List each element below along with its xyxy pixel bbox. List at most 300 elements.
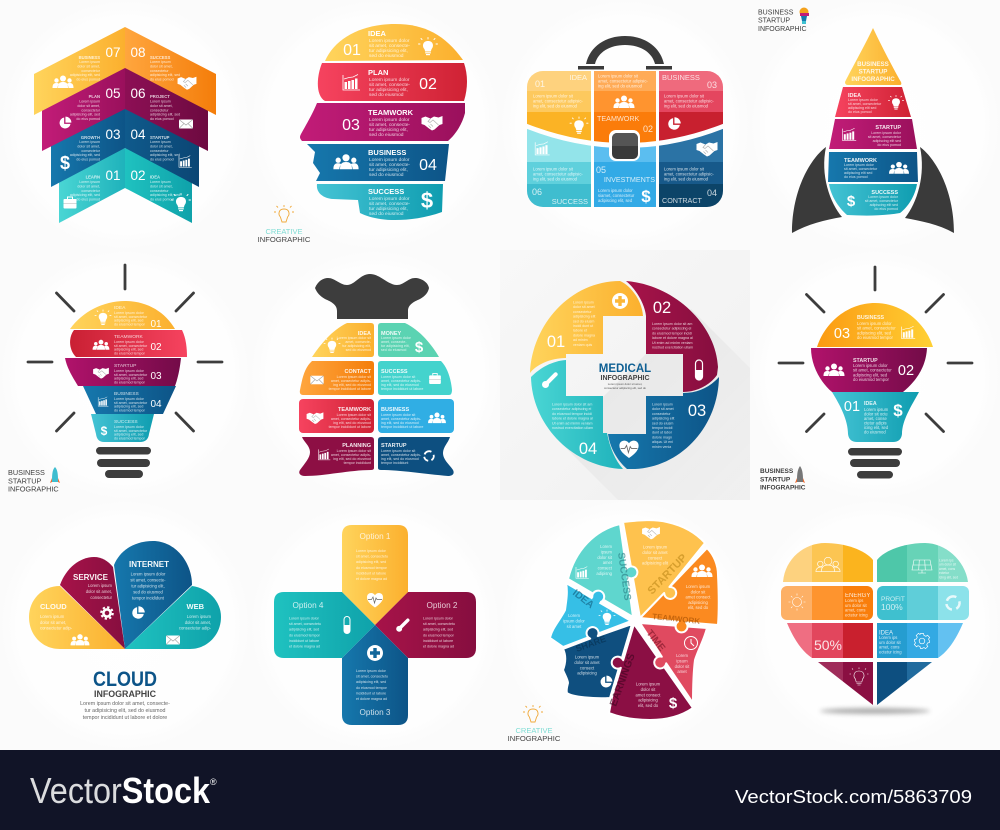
- rocket nose: [845, 28, 901, 85]
- arrow: blue 03 04: STARTUP: [150, 135, 170, 140]
- logo: business startup rocket right: BUSINESS: [760, 468, 793, 475]
- heart text and icons: um dolor sit: [879, 640, 901, 645]
- segment: teamwork: 03: [342, 117, 360, 134]
- medical segment 01: 01: [547, 333, 565, 351]
- rocket idea: adipiscing elit sed: [848, 106, 876, 110]
- briefcase text and icons: ing elit, sed do eiusmod: [664, 104, 709, 108]
- arrow: blue 03 04: dolor sit amet,: [150, 144, 173, 148]
- medical segment 03: dolore magn: [652, 435, 672, 439]
- bag cell startup: STARTUP: [381, 443, 407, 449]
- arrow: blue 03 04: Lorem ipsum: [150, 140, 171, 144]
- bag cell teamwork: amet, consectetur adipis-: [331, 417, 372, 421]
- segment: plan: Lorem ipsum dolor: [369, 78, 410, 83]
- arrow: purple 05 06: 06: [130, 86, 146, 101]
- heart text and icons: Lorem ips: [939, 558, 953, 562]
- bag cell teamwork: [299, 399, 374, 433]
- option 1: sit amet, consectetu: [356, 555, 388, 559]
- bulb segment success: sit amet, consectetur: [114, 429, 148, 433]
- puzzle earnings: [609, 624, 693, 720]
- cloud segment internet: sit amet, consecte-: [130, 578, 166, 582]
- bulb segment business: do eiusmod tempor: [114, 408, 146, 412]
- heart shadow: [820, 708, 930, 714]
- heart text and icons: ectetur icing: [879, 649, 902, 654]
- panel: plus options: [274, 525, 476, 725]
- medical segment 03: dolor sit amet: [652, 407, 674, 411]
- bag cell success: tempor incididunt ut labore: [381, 387, 423, 391]
- bag cell money: Lorem ipsum dolor: [381, 336, 411, 340]
- segment: teamwork: sed do eiusmod: [369, 132, 404, 138]
- logo: business startup top: STARTUP: [758, 18, 790, 25]
- bag cell startup: Lorem ipsum dolor sit: [381, 449, 415, 453]
- segment: plan: PLAN: [368, 68, 388, 77]
- logo: business startup top: BUSINESS: [758, 10, 793, 16]
- option 4: et dolore magna ad: [289, 644, 320, 648]
- medical segment 02: 02: [653, 299, 671, 317]
- medical segment 02: [626, 281, 718, 392]
- cloud segment web: Lorem ipsum: [187, 614, 211, 619]
- bulb segment 02: Lorem ipsum dolor: [853, 363, 888, 368]
- segment: business: tur adipisicing elit,: [369, 167, 408, 173]
- bag cell planning: tempor incididunt: [344, 461, 371, 465]
- puzzle texts and icons: $: [669, 695, 678, 712]
- bulb segment 03: do eiusmod tempor: [857, 335, 893, 340]
- segment: success: $: [421, 188, 433, 213]
- bulb segment business: Lorem ipsum dolor: [114, 397, 144, 401]
- briefcase text and icons: ing elit, sed do eiusmod: [664, 176, 709, 182]
- bulb segment idea: [70, 301, 175, 330]
- option 3: et dolore magna ad: [356, 697, 387, 701]
- bulb base: [96, 447, 151, 478]
- bulb segment idea: do eiusmod tempor: [114, 322, 146, 326]
- segment: plan: 02: [419, 76, 437, 93]
- option 2: incididunt ut labore: [423, 639, 453, 643]
- cloud title: [80, 668, 170, 721]
- bag cell money: [378, 323, 439, 357]
- medical segment 03: adipisicing elit: [652, 417, 674, 421]
- medical segment 01: incidi dunt ut: [573, 324, 593, 328]
- puzzle texts and icons: TIME: [644, 628, 667, 654]
- briefcase cells: [527, 71, 723, 208]
- medical segment 03: dunt ut labor: [652, 431, 673, 435]
- segment: teamwork: tur adipisicing elit,: [369, 127, 408, 133]
- cloud segment web: dolor sit amet,: [185, 620, 211, 625]
- briefcase text and icons: ing elit, sed do eiusmod: [533, 176, 578, 182]
- arrow: teal 01 02: LEARN: [86, 174, 100, 180]
- puzzle idea: [550, 583, 631, 647]
- segment: business: 04: [419, 157, 437, 174]
- bag cell planning: [299, 437, 374, 476]
- cloud segment internet: INTERNET: [129, 560, 169, 569]
- bag cell teamwork: Lorem ipsum dolor sit: [337, 413, 371, 417]
- rocket startup: sit amet, consectetur: [868, 135, 902, 139]
- arrow: yellow and orange 07 08: do eius pomod: [76, 78, 100, 82]
- puzzle texts and icons: SUCCESS: [615, 552, 633, 602]
- panel: briefcase: [527, 36, 723, 208]
- briefcase text and icons: IDEA: [569, 73, 587, 82]
- briefcase text and icons: 01: [535, 79, 545, 89]
- arrow: teal 01 02: Lorem ipsum: [79, 180, 100, 184]
- segment: business: sed do eiusmod: [369, 172, 404, 178]
- panel: cloud: [29, 541, 221, 721]
- option 2: do eiusmod tempor: [423, 633, 455, 637]
- rocket idea: Lorem ipsum dolor: [848, 98, 878, 102]
- puzzle texts and icons: adipisng: [596, 571, 613, 576]
- bulb segment success: SUCCESS: [114, 419, 138, 425]
- option 3: adipisicing elit, sed: [356, 680, 386, 684]
- puzzle texts and icons: adipisicing: [638, 698, 658, 703]
- cloud title: INFOGRAPHIC: [94, 689, 156, 700]
- puzzle texts and icons: consect: [648, 555, 663, 560]
- puzzle texts and icons: elit, sed do: [688, 605, 709, 610]
- bulb segment 01: amet, conse: [864, 416, 887, 421]
- arrow: blue 03 04: [51, 100, 199, 187]
- medical segment 03: sed do eiusm: [652, 421, 673, 425]
- logo: business startup top: [758, 8, 809, 33]
- medical segment 01: ad minim: [573, 338, 588, 342]
- logo: creative infographic lower: [508, 705, 561, 743]
- rocket startup: adipiscing elit sed: [873, 139, 901, 143]
- rocket success: sit amet, consectetur: [865, 199, 899, 203]
- briefcase text and icons: ing elit, sed do eiusmod: [598, 84, 643, 88]
- option 2: adipisicing elit, sed: [423, 628, 453, 632]
- panel: lightbulb five steps: [28, 265, 222, 478]
- bag cell money: tur adipisicing elit,: [381, 344, 410, 348]
- rocket idea: sit amet, consectetur: [848, 102, 882, 106]
- bag cell success: Lorem ipsum dolor sit: [381, 375, 415, 379]
- logo: creative infographic: CREATIVE: [266, 227, 302, 236]
- puzzle texts and icons: SHARE: [574, 634, 607, 654]
- heart row 3 left: [787, 623, 873, 658]
- cloud title: Lorem ipsum dolor sit amet, consecte-: [80, 701, 170, 707]
- medical segment 04: do eiusmod tempor incidi: [552, 412, 592, 416]
- bulb base: [848, 448, 902, 478]
- cloud segment internet: sed do eiusmod: [133, 590, 163, 594]
- option 3: sit amet, consectetu: [356, 675, 388, 679]
- bag cell startup: tempor incididunt: [381, 461, 408, 465]
- arrow: teal 01 02: do eius pomod: [76, 198, 100, 202]
- long shadow: [559, 309, 750, 500]
- segment: idea: IDEA: [368, 29, 387, 38]
- option 2: Option 2: [427, 601, 458, 610]
- segment: teamwork: sit amet, consecte-: [369, 122, 410, 128]
- logo: business startup rocket left: INFOGRAPHIC: [8, 485, 59, 494]
- medical segment 03: aliqua. Ut eni: [652, 440, 673, 444]
- rocket teamwork: adipiscing elit sed: [844, 171, 872, 175]
- medical title: [599, 363, 651, 390]
- puzzle startup: [623, 520, 705, 618]
- puzzle texts and icons: ipsum: [676, 658, 688, 663]
- briefcase text and icons: 02: [643, 124, 653, 134]
- medical title: INFOGRAPHIC: [600, 375, 650, 382]
- segment: success: Lorem ipsum dolor: [369, 197, 410, 202]
- briefcase text and icons: 04: [707, 188, 717, 198]
- medical segment 01: veniam quis: [573, 343, 592, 347]
- bag cell teamwork: tempor incididunt ut labore: [329, 425, 371, 429]
- panel: stacked arrows: [34, 27, 216, 223]
- bulb segment 02: STARTUP: [853, 358, 878, 364]
- logo: business startup rocket left: [8, 467, 60, 494]
- puzzle texts and icons: STARTUP: [646, 552, 690, 597]
- bag cell business: [378, 399, 454, 433]
- watermark logo: VectorStock: [30, 770, 211, 811]
- puzzle texts and icons: amet consect: [686, 595, 711, 600]
- medical segment 04: labore et dolore magna al: [552, 417, 593, 421]
- bag neck: [315, 274, 429, 319]
- medical segment 01: dolor sit amet: [573, 305, 595, 309]
- bulb rays: [28, 265, 222, 431]
- bulb segment success: do eiusmod tempor: [114, 436, 146, 440]
- medical segment 04: Lorem ipsum dolor sit am: [552, 402, 592, 406]
- arrow: blue 03 04: do eius pomod: [150, 158, 174, 162]
- bag cell success: SUCCESS: [381, 369, 408, 375]
- rocket idea: do eius pomod: [848, 110, 872, 114]
- arrow: purple 05 06: Lorem ipsum: [79, 100, 100, 104]
- arrow: teal 01 02: do eius pomod: [150, 198, 174, 202]
- puzzle texts and icons: dolor sit amet: [642, 550, 668, 555]
- bulb segment 02: sit amet, consectetur: [853, 368, 892, 373]
- bag cell money: MONEY: [381, 331, 402, 337]
- puzzle teamwork: [640, 548, 719, 632]
- medical segment 03: minim venia: [652, 445, 671, 449]
- arrow: purple 05 06: adipisicing elit, sed: [70, 113, 100, 117]
- segment: idea: 01: [343, 42, 361, 59]
- puzzle texts and icons: consect: [580, 665, 595, 670]
- rocket startup: STARTUP: [875, 125, 901, 131]
- medical segment 03: tempor incidi: [652, 426, 673, 430]
- logo: business startup rocket right: [760, 466, 806, 492]
- puzzle texts and icons: ipsum: [601, 549, 613, 554]
- bag cell business: tempor incididunt ut labore: [381, 425, 423, 429]
- bulb segment business: adipiscing elit, sed: [114, 405, 143, 409]
- option 4: [274, 592, 375, 658]
- bag cell idea: tur adipisicing elit,: [342, 344, 371, 348]
- briefcase text and icons: amet, consectetur adipisic-: [664, 98, 714, 104]
- briefcase text and icons: Lorem ipsum dolor sit: [664, 94, 704, 98]
- briefcase text and icons: SUCCESS: [552, 197, 588, 206]
- bulb segment 03: Lorem ipsum dolor: [857, 321, 892, 326]
- rocket startup: do eius pomod: [877, 143, 901, 147]
- option 1: Lorem ipsum dolor: [356, 549, 386, 553]
- bulb segment 03: adipiscing elit, sed: [857, 330, 892, 335]
- puzzle texts and icons: ipsum dolor: [563, 618, 585, 623]
- bag cell money: amet, consecte-: [381, 340, 407, 344]
- arrow: purple 05 06: consectetur: [81, 108, 101, 112]
- heart text and icons: ectetur: [939, 571, 950, 575]
- heart text and icons: Lorem ips: [845, 598, 863, 603]
- arrow: purple 05 06: do eius pomod: [76, 117, 100, 121]
- puzzle texts and icons: sit amet: [567, 624, 582, 629]
- segment: success: tur adipisicing elit,: [369, 206, 408, 212]
- bag cell success: ing elit, sed do eiusmod: [381, 383, 419, 387]
- logo: creative infographic lower: CREATIVE: [516, 726, 552, 735]
- arrow: teal 01 02: Lorem ipsum: [150, 180, 171, 184]
- cloud segment service: dolor sit amet,: [86, 589, 112, 594]
- briefcase text and icons: amet, consectetur adipisic-: [598, 78, 648, 84]
- rocket idea: [835, 87, 911, 117]
- option 2: [375, 592, 476, 658]
- medical title: Lorem ipsum dolor sit amet,: [608, 382, 642, 386]
- bulb segment teamwork: TEAMWORK: [114, 334, 144, 340]
- logo: business startup rocket right: STARTUP: [760, 476, 791, 483]
- puzzle texts and icons: Lorem ipsum: [686, 584, 710, 589]
- briefcase text and icons: siamet, consectetur: [598, 193, 635, 198]
- option 3: Lorem ipsum dolor: [356, 669, 386, 673]
- arrow: teal 01 02: 01: [105, 168, 121, 183]
- medical segment 01: consectetur: [573, 310, 592, 314]
- briefcase text and icons: [532, 73, 718, 206]
- puzzle idea tab: [592, 591, 604, 602]
- medical title: consectetur adipiscing elit, sed do: [604, 386, 646, 390]
- medical segment 03: [608, 377, 719, 469]
- bulb segment teamwork: Lorem ipsum dolor: [114, 340, 144, 344]
- medical segment 02: labore et dolore magna al: [652, 336, 693, 340]
- medical segment 01: dolore magna: [573, 333, 595, 337]
- arrow: purple 05 06: dolor sit amet,: [77, 104, 100, 108]
- medical segment 01: [530, 281, 643, 373]
- puzzle texts and icons: Lorem: [676, 653, 688, 658]
- arrow: purple 05 06: PROJECT: [150, 94, 170, 99]
- arrow: blue 03 04: Lorem ipsum: [79, 140, 100, 144]
- heart row 4 left: [818, 662, 873, 705]
- briefcase text and icons: TEAMWORK: [597, 114, 640, 123]
- registered mark: ®: [210, 777, 217, 787]
- arrow: yellow and orange 07 08: SUCCESS: [150, 55, 170, 60]
- briefcase text and icons: INVESTMENTS: [604, 175, 655, 184]
- puzzle texts and icons: consect: [598, 566, 613, 571]
- puzzle texts and icons: adipisicing: [688, 600, 708, 605]
- bulb segment startup: sit amet, consectetur: [114, 373, 148, 377]
- bag cell idea: [312, 323, 374, 357]
- puzzle texts and icons: Lorem: [568, 613, 580, 618]
- heart row 4 right: [877, 662, 932, 705]
- medical segment 01: adipisicing elit: [573, 315, 595, 319]
- bag cell idea: amet, consecte-: [345, 340, 372, 344]
- rocket nose: BUSINESS: [857, 61, 889, 68]
- puzzle texts and icons: [563, 527, 712, 712]
- briefcase text and icons: Lorem ipsum dolor sit: [533, 94, 573, 98]
- rocket success: Lorem ipsum dolor: [868, 195, 898, 199]
- bulb segment idea: 01: [150, 319, 162, 330]
- cloud segment internet: tur adipisicing elit,: [131, 584, 165, 588]
- option 1: Option 1: [360, 532, 391, 541]
- rocket teamwork: TEAMWORK: [844, 158, 877, 164]
- puzzle texts and icons: Lorem ipsum: [575, 654, 599, 660]
- briefcase text and icons: amet, consectetur adipisic-: [533, 98, 583, 104]
- puzzle texts and icons: Lorem ipsum: [643, 544, 667, 550]
- bag cell business: amet, consectetur adipis-: [381, 417, 422, 421]
- arrow: yellow and orange 07 08: consectetur: [150, 69, 169, 73]
- briefcase text and icons: BUSINESS: [662, 73, 700, 82]
- bulb segment teamwork: 02: [150, 342, 162, 353]
- rocket idea: IDEA: [848, 93, 861, 99]
- medical segment 03: Lorem ipsum: [652, 402, 673, 406]
- bulb segment 01: [832, 392, 919, 442]
- bulb segment 03: BUSINESS: [857, 315, 885, 321]
- bulb segment business: sit amet, consectetur: [114, 401, 148, 405]
- logo: business startup rocket left: STARTUP: [8, 476, 42, 485]
- arrow: blue 03 04: consectetur: [81, 149, 101, 153]
- footer bar: [0, 750, 1000, 830]
- logo: business startup rocket right: INFOGRAPHIC: [760, 485, 806, 492]
- puzzle texts and icons: amet: [603, 560, 613, 565]
- rocket success: [829, 184, 917, 216]
- segment: business: [307, 144, 449, 181]
- segment: teamwork: Lorem ipsum dolor: [369, 118, 410, 123]
- bulb segment success: Lorem ipsum dolor: [114, 425, 144, 429]
- rocket fins: [792, 147, 954, 233]
- briefcase text and icons: Lorem ipsum dolor sit: [664, 166, 704, 172]
- segment: teamwork: [300, 103, 465, 141]
- bulb segment 01: Lorem ipsum: [864, 407, 888, 412]
- cloud segment service: SERVICE: [73, 573, 109, 582]
- briefcase text and icons: Lorem ipsum dolor: [598, 188, 633, 193]
- medical segment 01: sed do eiusm: [573, 319, 594, 323]
- heart text and icons: [788, 557, 960, 685]
- bag cell business: ing elit, sed do eiusmod: [381, 421, 419, 425]
- bulb segment 01: 01: [844, 399, 860, 415]
- cloud segment web: [125, 586, 221, 649]
- bag cell contact: amet, consectetur adipis-: [331, 379, 372, 383]
- segment: idea: [325, 24, 463, 61]
- cloud segment service: consectetur: [90, 595, 113, 600]
- puzzle texts and icons: dolor sit: [675, 664, 690, 669]
- heart text and icons: PROFIT: [881, 596, 905, 603]
- medical segment 03: 03: [688, 402, 706, 420]
- segment: business: sit amet, consecte-: [369, 162, 410, 168]
- medical segment 02: Ut enim ad minim veniam: [652, 341, 693, 345]
- cloud segment web: WEB: [186, 602, 205, 611]
- arrow: teal 01 02: adipisicing elit, sed: [70, 193, 100, 197]
- heart text and icons: icing elit, sed: [939, 575, 958, 579]
- rocket success: SUCCESS: [871, 190, 898, 196]
- arrow: blue 03 04: do eius pomod: [76, 158, 100, 162]
- arrow: yellow and orange 07 08: BUSINESS: [79, 55, 100, 60]
- bag cell success: amet, consectetur adipis-: [381, 379, 422, 383]
- arrow: teal 01 02: adipisicing elit, sed: [150, 193, 180, 197]
- puzzle texts and icons: amet: [677, 669, 687, 674]
- cloud segment internet: Lorem ipsum dolor: [131, 572, 165, 576]
- arrow: yellow and orange 07 08: do eius pomod: [150, 78, 174, 82]
- puzzle texts and icons: TEAMWORK: [652, 612, 701, 626]
- logo: creative infographic: [258, 205, 311, 244]
- bulb segment 01: icing elit, sed: [864, 425, 889, 430]
- bulb segment 03: [817, 303, 933, 347]
- arrow: blue 03 04: GROWTH: [81, 135, 100, 140]
- segment: plan: [318, 63, 467, 101]
- bag cell contact: CONTACT: [345, 369, 372, 375]
- segment: idea: sed do eiusmod: [369, 53, 404, 59]
- bulb segment idea: Lorem ipsum dolor: [114, 311, 144, 315]
- bulb segment 02: adipiscing elit, sed: [853, 372, 888, 377]
- bag cell startup: ing elit, sed do eiusmod: [381, 457, 419, 461]
- bulb segment business: BUSINESS: [114, 391, 139, 397]
- heart text and icons: um dolor sit: [939, 563, 956, 567]
- rocket teamwork: sit amet, consectetur: [844, 167, 878, 171]
- briefcase text and icons: adipiscing elit, sed: [598, 198, 633, 203]
- heart text and icons: amet, cons: [879, 645, 899, 650]
- briefcase text and icons: 06: [532, 187, 542, 197]
- bag cell idea: sed do eiusmod: [346, 348, 371, 352]
- rocket success: $: [847, 193, 856, 210]
- option 3: Option 3: [360, 708, 391, 717]
- bulb segment success: adipiscing elit, sed: [114, 433, 143, 437]
- cloud segment internet: [114, 541, 192, 649]
- option 3: incididunt ut labore: [356, 691, 386, 695]
- heart text and icons: IDEA: [879, 630, 893, 636]
- option 4: Option 4: [293, 601, 324, 610]
- option 1: [342, 525, 408, 625]
- option 4: Lorem ipsum dolor: [289, 616, 319, 620]
